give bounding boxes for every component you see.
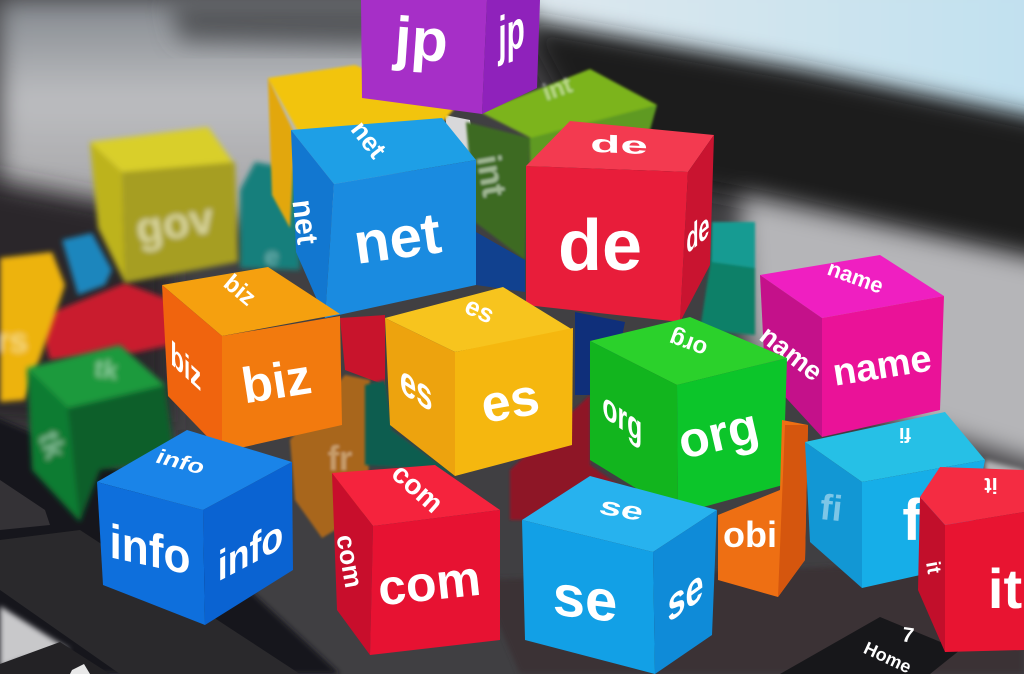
- cube: jp: jp: [391, 4, 450, 75]
- cube: gov: gov: [132, 193, 218, 254]
- cube: info: info: [110, 514, 190, 585]
- cube: red behind biz: [340, 315, 385, 385]
- cube: org: org: [665, 324, 711, 363]
- cube: biz: [162, 267, 342, 452]
- cube: org: org: [673, 397, 764, 470]
- cube: info: info: [218, 509, 283, 591]
- cube: dark red behind: [510, 395, 640, 520]
- cube: jp: [361, 0, 540, 114]
- cube: it: [918, 467, 1024, 652]
- cube: blue blurred back left: [62, 233, 112, 295]
- keyboard key: Home: 7: [901, 623, 915, 648]
- cube: de: de: [590, 130, 648, 160]
- cube: com: [331, 457, 500, 655]
- cube: net: [285, 115, 476, 318]
- cube: biz: biz: [171, 333, 201, 399]
- cube: es: es: [477, 368, 544, 435]
- cube: biz: biz: [218, 269, 261, 311]
- cube: green back int: int: [539, 71, 576, 107]
- cube: red blurred back left: [38, 283, 170, 360]
- cube: navy center behind: [476, 232, 625, 395]
- cube: it: it: [988, 557, 1022, 620]
- cube: net: net: [345, 115, 393, 164]
- cube: fi: fi: [818, 486, 844, 529]
- cube: teal behind de: [700, 222, 755, 335]
- cube: de: de: [686, 203, 709, 262]
- cube: com: com: [375, 550, 483, 616]
- cube: net: net: [285, 198, 324, 246]
- cube: dark teal es behind: [365, 380, 455, 476]
- cube: obi: [718, 420, 808, 597]
- cube: fi: fi: [899, 423, 911, 445]
- cube: se: se: [596, 491, 648, 526]
- cube: green back int: [466, 69, 657, 260]
- cube: yellow back top: [268, 65, 455, 228]
- cube: es: es: [460, 290, 499, 330]
- cube: gov: [90, 127, 238, 283]
- cube: se: se: [668, 557, 703, 634]
- cube: it: it: [984, 473, 998, 498]
- cube: jp: jp: [498, 0, 525, 68]
- cube: com: com: [331, 532, 369, 590]
- cube: biz: biz: [238, 348, 315, 414]
- cube: se: [522, 476, 717, 674]
- cube: es: es: [400, 355, 433, 422]
- cube: se: se: [553, 563, 617, 635]
- cube: org: org: [602, 383, 642, 453]
- cube: name: name: [824, 255, 887, 299]
- cube: green neighbour of gov: tk: [93, 353, 120, 386]
- cube: name: [754, 255, 944, 437]
- cube: info: info: [152, 445, 209, 479]
- cube: obi: obi: [723, 514, 777, 555]
- cube: brown fr behind: [290, 375, 370, 538]
- cube: es: [385, 287, 573, 476]
- cube: info: [97, 430, 293, 625]
- cube: org: [590, 317, 787, 514]
- cube: green neighbour of gov: [27, 345, 175, 522]
- cube: green back int: int: [469, 152, 513, 200]
- cube: fi: f: [902, 488, 922, 553]
- keyboard arrow key: [70, 664, 90, 674]
- cube: net: net: [350, 200, 445, 277]
- cube: green neighbour of gov: tk: [31, 427, 72, 464]
- cube: it: it: [921, 560, 945, 576]
- cube: yellow blurred far left: [0, 252, 65, 402]
- cube: com: com: [386, 457, 449, 519]
- cube: teal blurred behind net: e: [265, 241, 279, 271]
- cube: teal blurred behind net: [240, 162, 300, 271]
- cube: de: [526, 121, 714, 322]
- cube: name: name: [754, 320, 828, 387]
- cube: brown fr behind: fr: [328, 440, 352, 478]
- cube: name: name: [830, 338, 934, 395]
- cube: fi: [805, 412, 985, 588]
- cube: de: de: [558, 206, 642, 286]
